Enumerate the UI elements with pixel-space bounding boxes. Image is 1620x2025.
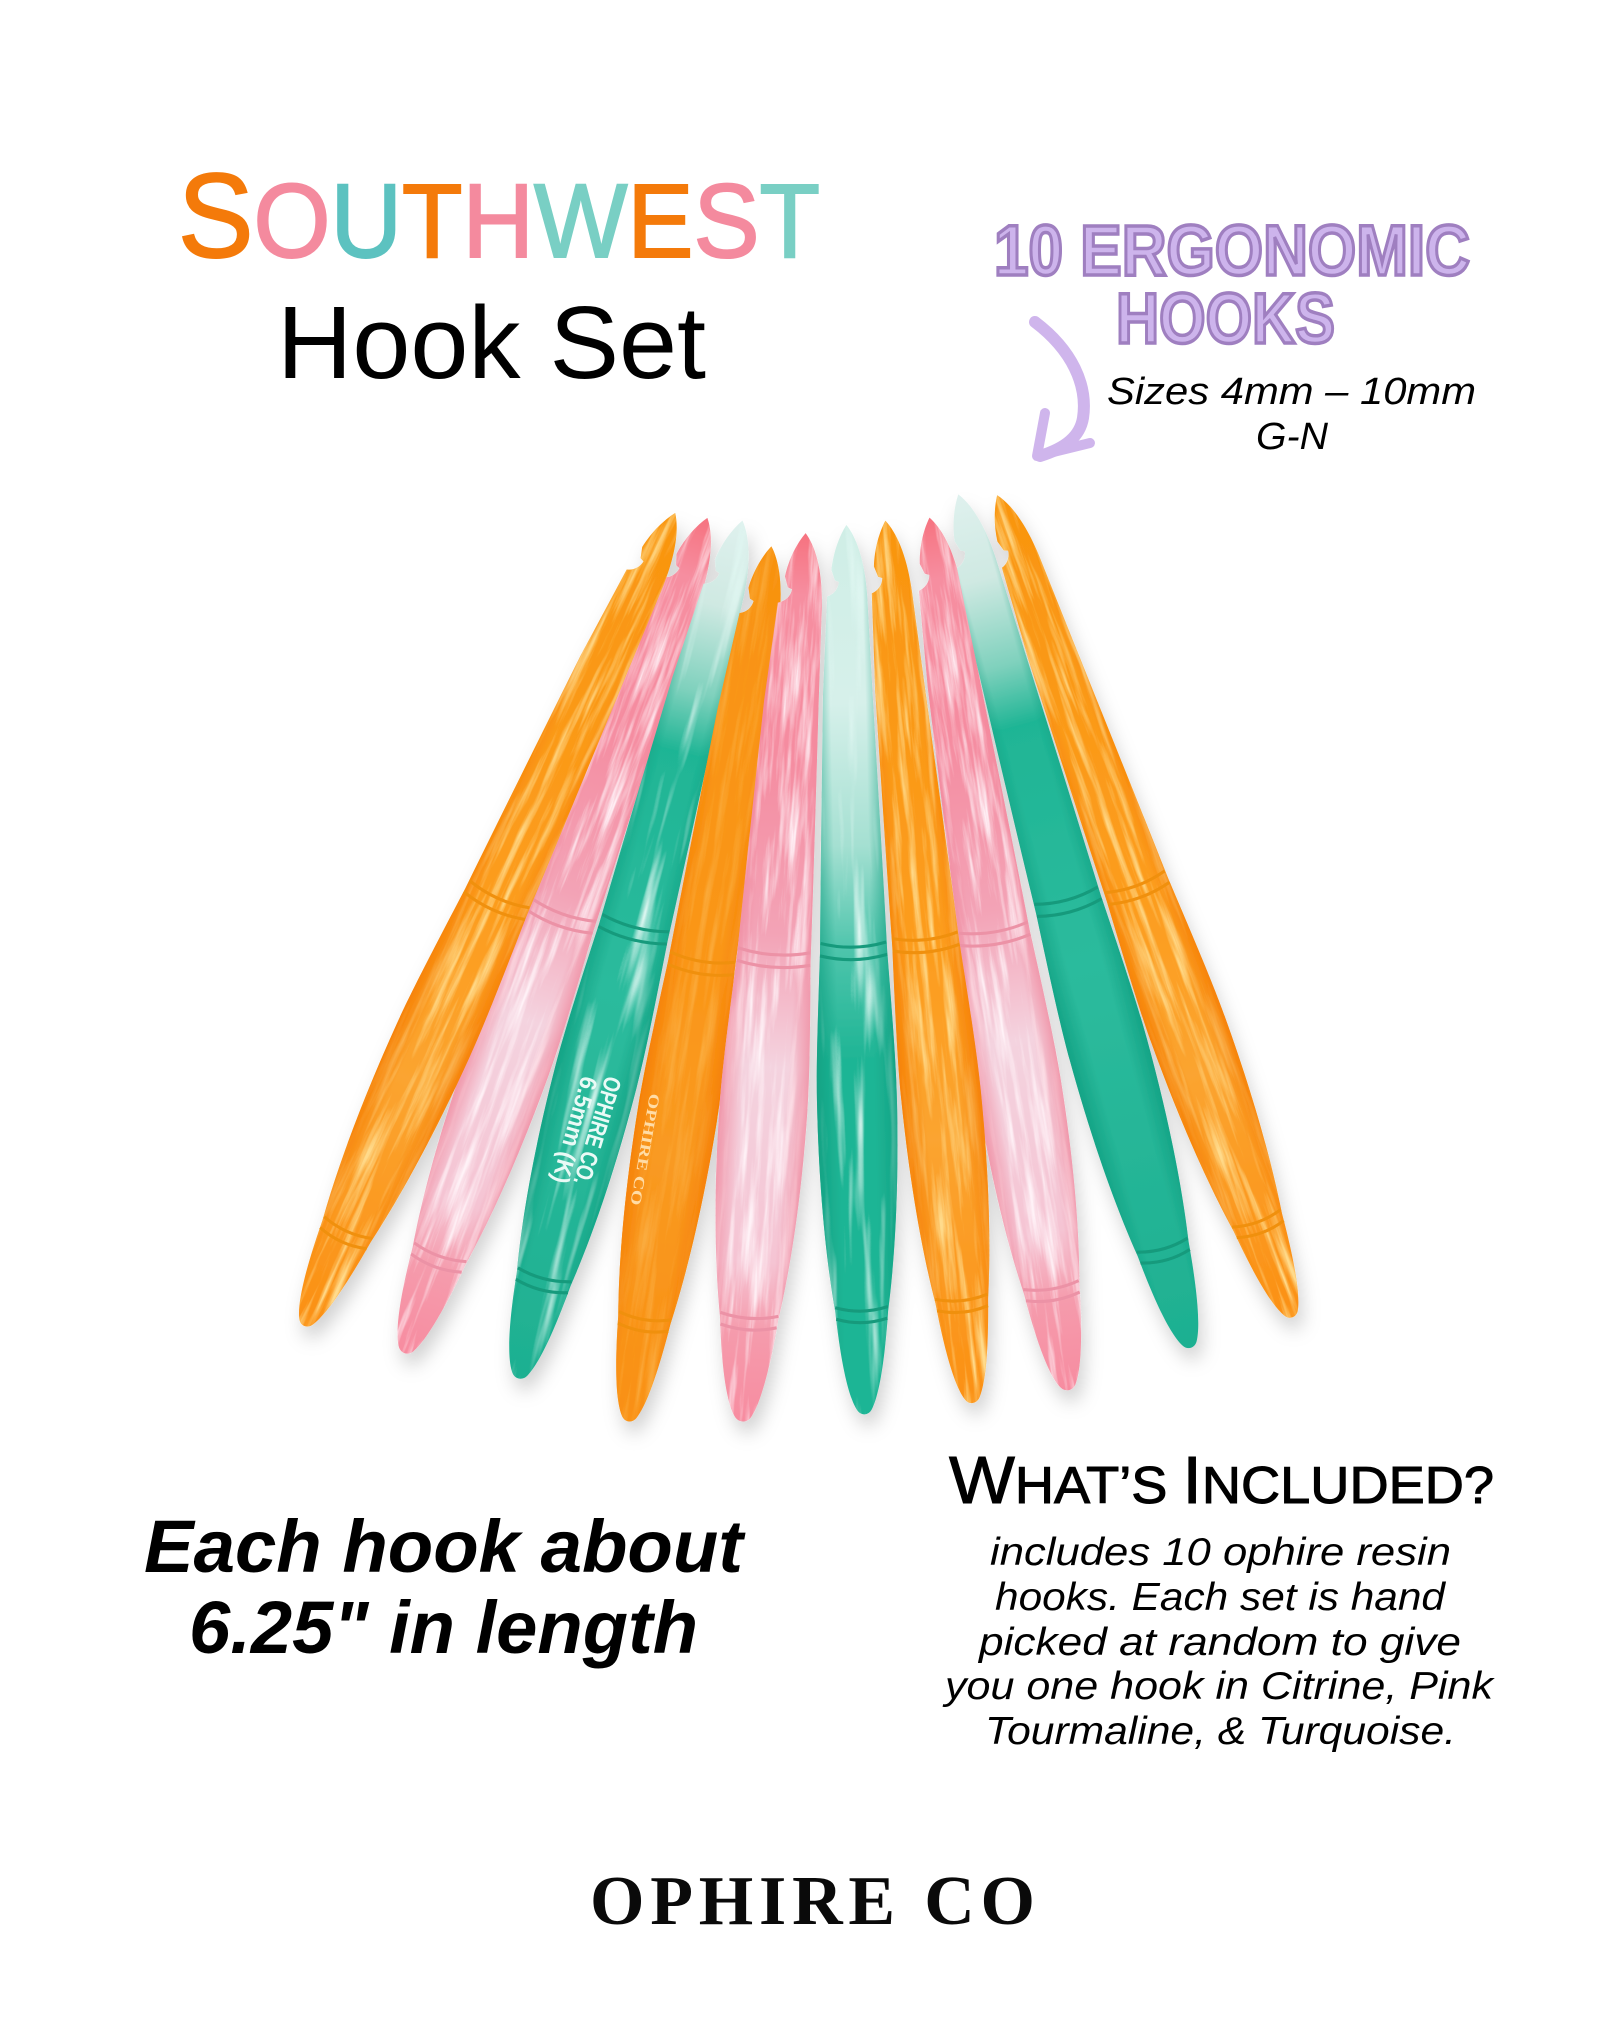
hook: pink 8 [885,511,1110,1397]
hook: teal 9 [917,484,1229,1359]
text: hook length: 6.25" in length [189,1586,698,1669]
callout heading: 10 ergonomic hooks: HOOKS [1116,280,1335,359]
title: Southwest: SOUTHWEST [178,149,820,283]
hook: orange 1 [267,495,709,1342]
text: included description: you one hook in Citrine, Pink [942,1665,1496,1708]
heading: What's Included?: WHAT’S INCLUDED? [949,1443,1494,1518]
text: included description: includes 10 ophire resin [990,1531,1451,1574]
text: included description: picked at random to give [978,1621,1461,1664]
text: included description [942,1531,1496,1753]
brand: Ophire Co: OPHIRE CO [590,1863,1035,1940]
hook: pink 2 [364,503,745,1367]
fan of ten crochet hooks [267,483,1329,1428]
text: sizes [1107,371,1476,458]
text: included description: Tourmaline, & Turquoise. [985,1710,1456,1753]
hook: orange 4 with engraved brand: OPHIRE CO [626,1092,662,1206]
text: hook length [144,1505,746,1669]
hook: teal 6 [804,524,904,1415]
hook: orange 7 [843,517,1012,1407]
text: hook length: Each hook about [144,1505,746,1588]
hook: orange 10 [958,483,1329,1331]
text: sizes: G-N [1256,416,1329,458]
text: included description: hooks. Each set is hand [995,1576,1446,1619]
callout heading: 10 ergonomic hooks: 10 ERGONOMIC [994,212,1470,291]
callout heading: 10 ergonomic hooks [994,212,1470,359]
hook: pink 5 [698,530,847,1424]
hook: teal 3 with engraved size [477,509,781,1389]
text: sizes: Sizes 4mm – 10mm [1107,371,1476,413]
hook: orange 4 with engraved brand [589,540,808,1428]
hook: teal 3 with engraved size: 6.5mm (K) [546,1073,602,1187]
subtitle: Hook Set: Hook Set [277,285,706,400]
hook: teal 3 with engraved size: OPHIRE CO. [568,1073,626,1188]
icon: curved arrow [1035,322,1090,456]
